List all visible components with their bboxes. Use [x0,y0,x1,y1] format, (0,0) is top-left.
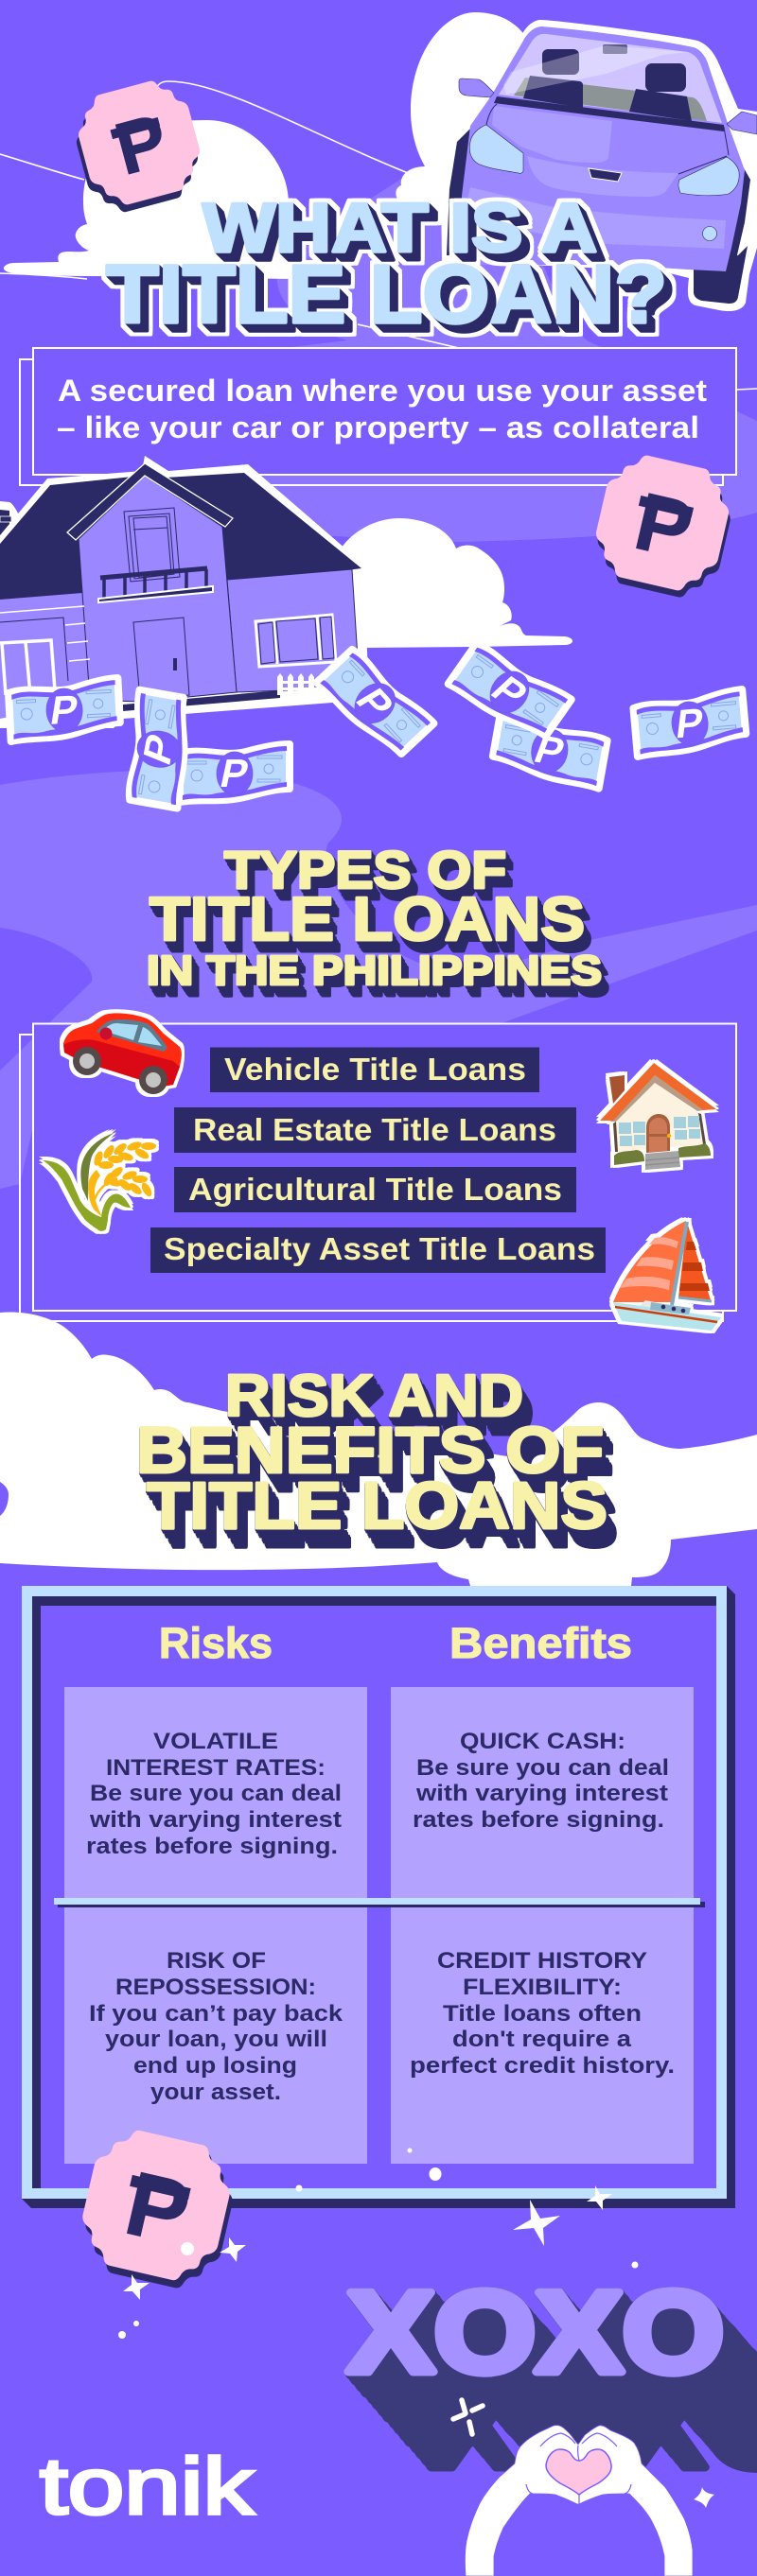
panel: definition: A secured loan where you use your asset [58,374,707,408]
card: risk of repossession: REPOSSESSION: [115,1975,316,2000]
icon: money bill 2: P [135,728,182,771]
icon: wheat [43,1133,156,1231]
side wall left [0,593,91,719]
card: risk of repossession: your loan, you will [105,2027,327,2052]
card: volatile interest rates: VOLATILE [153,1729,278,1754]
decorative lines [0,81,757,390]
panel frame [22,1586,727,2199]
divider [54,1898,705,1907]
hood lines [486,104,729,174]
heading: risk and benefits: RISK AND [225,1364,523,1429]
label: vehicle: Vehicle Title Loans [224,1052,526,1087]
heading: types of title loans: TYPES OF [224,840,506,899]
illustration: house [0,456,374,728]
gable trim [67,463,233,540]
icon: money bill 4: P [347,682,403,724]
panel shadow [22,1586,735,2208]
heading: benefits: Benefits [449,1619,632,1667]
decoration: sparkles and dots [118,2149,714,2508]
fence [277,673,319,695]
title: what is a title loan: WHAT IS A [202,190,597,267]
card: quick cash [413,1729,669,1833]
card: volatile interest rates: Be sure you can deal [90,1781,342,1806]
door [133,618,189,700]
label: agricultural: Agricultural Title Loans [188,1172,562,1207]
card: risk of repossession: end up losing [133,2053,297,2079]
icon: tag bottom left: P [117,2153,198,2265]
dark sides [447,129,473,255]
card: risk of repossession: If you can’t pay back [89,2001,343,2027]
card: credit history flexibility: CREDIT HISTORY [437,1948,647,1974]
grille [589,168,622,182]
card: volatile interest rates: INTEREST RATES: [106,1755,326,1781]
card: credit history flexibility: don't require a [452,2027,632,2052]
card: volatile interest rates: rates before signing. [86,1834,338,1859]
card: credit history flexibility: FLEXIBILITY: [463,1975,622,2000]
right window [255,615,336,667]
heading: risk and benefits: TITLE LOANS [147,1469,607,1542]
card: volatile interest rates [86,1729,342,1859]
title: what is a title loan: TITLE LOAN? [106,249,667,340]
logo: tonik: tonik [40,2442,255,2531]
background swoosh lower [0,770,757,1189]
icon: money bill 4 [317,643,433,763]
cloud: right of house [336,518,572,648]
left portal [0,618,68,681]
card: volatile interest rates: with varying interest [89,1807,342,1833]
icon: sailboat [613,1221,721,1331]
heading: risks: Risks [159,1619,273,1667]
house outline [0,456,374,728]
panel: definition [20,348,736,485]
dormer window [124,508,180,582]
label: agricultural [174,1167,576,1212]
icon: tag middle right [586,448,740,604]
heading: types of title loans: IN THE PHILIPPINES [147,948,602,994]
cloud: large behind risks heading [0,1312,757,1586]
icon: money bill 6: P [529,727,571,774]
icon: money bill 7: P [674,700,706,746]
panel: types [20,1023,736,1321]
xoxo lettering: XOXO [347,2268,724,2396]
icon: money bill 1 [9,678,121,741]
interior [514,78,707,121]
icon: money bill 7 [633,689,747,757]
mirrors [459,78,494,97]
glass shine [503,45,688,95]
illustration: car [441,20,757,311]
icon: money bill 6 [490,712,608,789]
roof [0,463,361,605]
windshield [499,34,722,123]
cloud: top right behind car [396,12,530,211]
illustration: heart hands [465,2426,693,2576]
heading: types of title loans: TITLE LOANS [150,884,585,953]
icon: money bill 3 [180,744,290,802]
cloud: behind title [4,120,293,279]
panel: risks and benefits [22,1586,735,2208]
card: risk of repossession: your asset. [150,2080,281,2105]
icon: red car [63,1013,182,1094]
icon: money bill 2 [120,690,197,809]
label: specialty asset: Specialty Asset Title Loans [164,1231,595,1266]
tire [694,246,748,304]
side tower [0,501,24,558]
card backgrounds [64,1687,694,2164]
side wall right [227,569,360,692]
icon: money bill 3: P [217,751,253,795]
heading: types of title loans [147,840,602,994]
icon: money bill 1: P [47,687,81,733]
balcony [99,568,212,601]
icon: tag middle right: P [627,476,700,577]
panel: definition: – like your car or property – as collateral [57,410,699,444]
fog light [702,227,717,240]
heading: risk and benefits [136,1364,607,1542]
sparkle cross [453,2400,483,2434]
card: quick cash: QUICK CASH: [460,1729,625,1754]
headlights [469,125,523,173]
car white outline [441,20,757,311]
icon: money bill 5 [449,636,572,747]
icon: tag top left: P [107,97,176,191]
front wall [79,476,237,702]
card: credit history flexibility: perfect credit history. [410,2053,675,2079]
card: risk of repossession [89,1948,343,2105]
card: credit history flexibility: Title loans often [443,2001,642,2027]
dash [494,96,724,131]
base [123,690,280,711]
body [461,26,745,271]
label: specialty asset [150,1227,606,1273]
card: risk of repossession: RISK OF [167,1948,266,1974]
label: real estate [174,1107,576,1153]
card: quick cash: rates before signing. [413,1807,664,1833]
icon: house [600,1063,716,1170]
card: quick cash: Be sure you can deal [416,1755,669,1781]
icon: tag top left [66,74,210,219]
label: vehicle [210,1048,539,1092]
card: credit history flexibility [410,1948,675,2079]
siding [0,606,90,661]
card: quick cash: with varying interest [415,1781,668,1806]
icon: tag bottom left [72,2122,244,2296]
heading: risk and benefits: BENEFITS OF [136,1414,604,1487]
hood shading [492,106,612,163]
icon: money bill 5: P [483,669,537,715]
label: real estate: Real Estate Title Loans [193,1112,556,1147]
left window [0,640,55,695]
background swoosh upper [189,175,757,542]
title: what is a title loan [106,190,667,340]
